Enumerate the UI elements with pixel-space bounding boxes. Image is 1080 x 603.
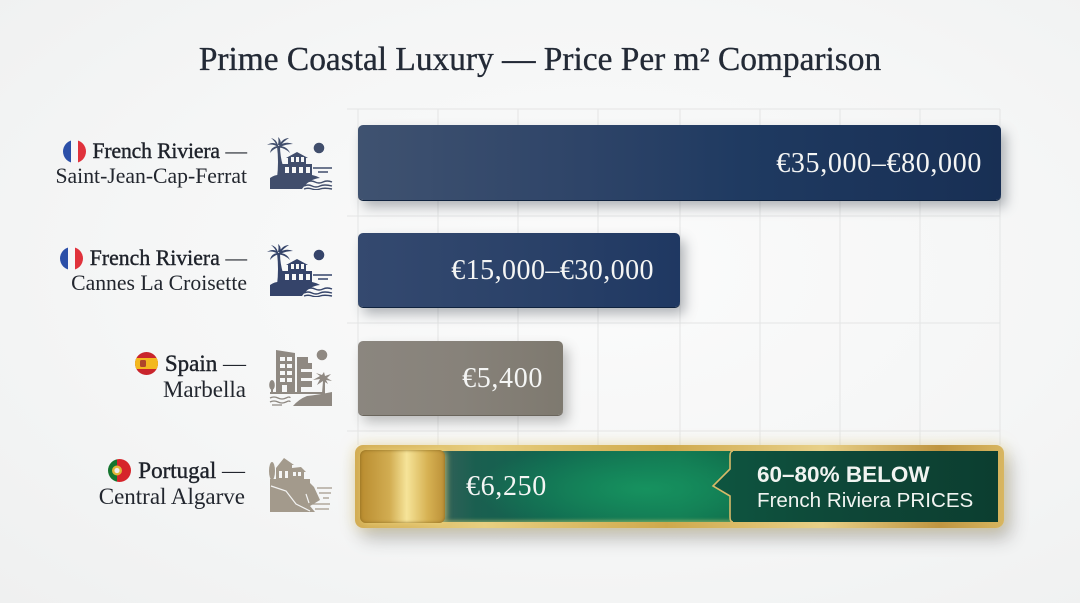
gold block <box>360 450 445 523</box>
label: French Riviera Cannes La Croisette <box>60 246 248 295</box>
callout text: French Riviera PRICES <box>757 489 973 512</box>
bar: Saint-Jean-Cap-Ferrat <box>358 125 1001 200</box>
label: French Riviera Cannes La Croisette: French Riviera — <box>90 246 247 270</box>
label: Spain Marbella: Spain — <box>165 351 246 376</box>
bar: Marbella <box>358 341 563 415</box>
row: Central Algarve <box>99 458 332 512</box>
title: Prime Coastal Luxury — Price Per m² Comparison <box>199 41 881 78</box>
bar: Cannes La Croisette <box>358 233 680 307</box>
callout text: 60–80% BELOW <box>757 462 930 487</box>
label: French Riviera Saint-Jean-Cap-Ferrat: French Riviera — <box>92 139 247 163</box>
highlighted bar: Central Algarve <box>355 445 1004 528</box>
green fill <box>361 451 998 522</box>
callout text <box>757 462 973 512</box>
row: Cannes La Croisette <box>60 244 332 297</box>
chart grid <box>347 108 1000 445</box>
label: Spain Marbella <box>135 351 246 402</box>
value label: €35,000–€80,000 <box>776 148 982 179</box>
icon: coastal villa <box>267 137 332 190</box>
value label: €15,000–€30,000 <box>451 255 654 286</box>
label: Portugal Central Algarve: Central Algarve <box>99 484 245 509</box>
icon: beachfront apartments <box>269 350 332 406</box>
callout: 60–80% below <box>712 451 998 522</box>
icon: coastal villa <box>267 244 332 297</box>
icon: cliff villa <box>269 458 332 512</box>
label: Portugal Central Algarve: Portugal — <box>138 458 245 483</box>
row: Saint-Jean-Cap-Ferrat <box>55 137 332 190</box>
label: Portugal Central Algarve <box>99 458 246 509</box>
value label: €6,250 <box>466 471 547 502</box>
label: French Riviera Saint-Jean-Cap-Ferrat <box>55 139 248 188</box>
label: French Riviera Cannes La Croisette: Cannes La Croisette <box>71 271 247 295</box>
row: Marbella <box>135 350 332 406</box>
label: French Riviera Saint-Jean-Cap-Ferrat: Saint-Jean-Cap-Ferrat <box>55 164 247 188</box>
label: Spain Marbella: Marbella <box>163 377 246 402</box>
value label: €5,400 <box>462 363 543 394</box>
